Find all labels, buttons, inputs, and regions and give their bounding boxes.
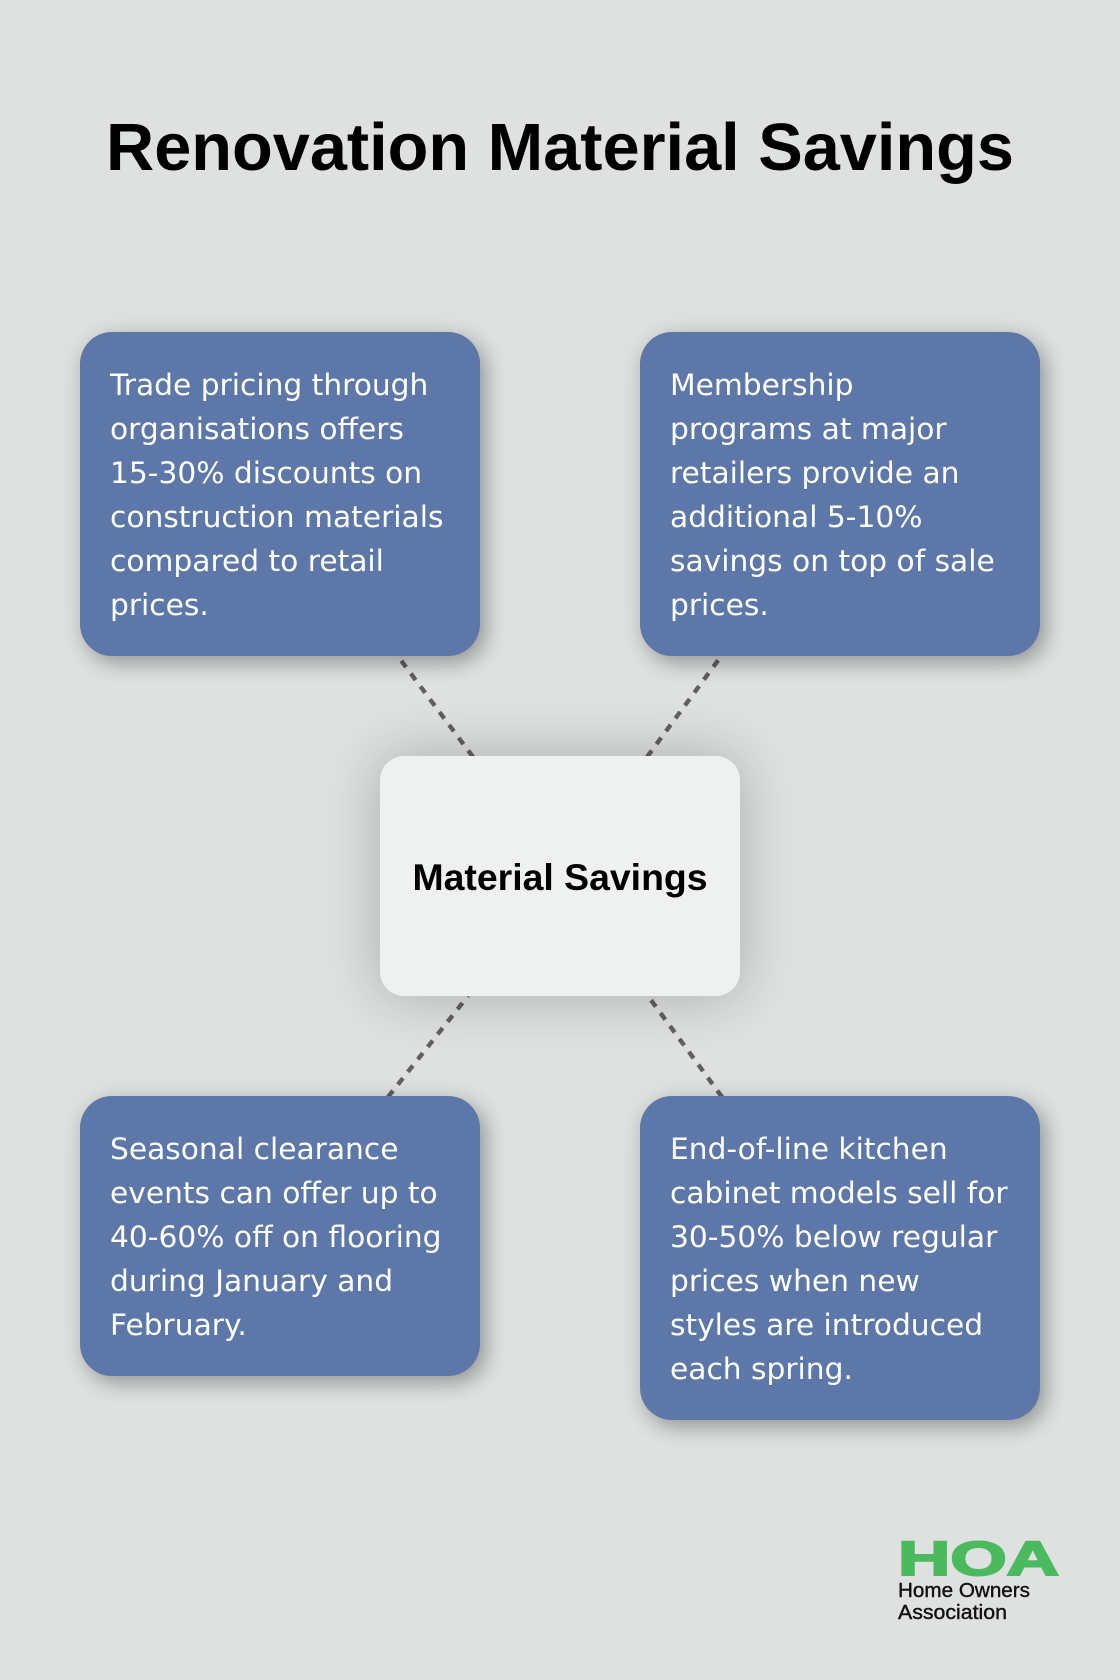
panel: trade pricing: Trade pricing through [110, 368, 428, 403]
panel: trade pricing: construction materials [110, 500, 443, 535]
panel: trade pricing: compared to retail [110, 544, 384, 579]
panel: trade pricing [80, 332, 480, 656]
title: Renovation Material Savings [106, 111, 1014, 185]
panel: end-of-line cabinets: each spring. [670, 1352, 853, 1387]
panel: seasonal clearance: during January and [110, 1264, 393, 1299]
panel: membership programs: Membership [670, 368, 854, 403]
panel: trade pricing: 15-30% discounts on [110, 456, 422, 491]
logo: HOA: HOA [898, 1533, 1059, 1586]
panel: end-of-line cabinets: prices when new [670, 1264, 920, 1299]
panel: end-of-line cabinets: End-of-line kitchen [670, 1132, 948, 1167]
panel: seasonal clearance [80, 1096, 480, 1376]
panel: end-of-line cabinets: styles are introduced [670, 1308, 983, 1343]
panel: membership programs: programs at major [670, 412, 947, 447]
panel: seasonal clearance: February. [110, 1308, 247, 1343]
panel: seasonal clearance: events can offer up to [110, 1176, 438, 1211]
panel: trade pricing: prices. [110, 588, 209, 623]
panel: seasonal clearance: 40-60% off on flooring [110, 1220, 442, 1255]
panel: membership programs: savings on top of sale [670, 544, 995, 579]
panel: membership programs: additional 5-10% [670, 500, 922, 535]
logo: HOA [898, 1533, 1060, 1624]
panel: membership programs [640, 332, 1040, 656]
panel: end-of-line cabinets: cabinet models sell for [670, 1176, 1008, 1211]
panel: membership programs: prices. [670, 588, 769, 623]
panel: seasonal clearance: Seasonal clearance [110, 1132, 398, 1167]
logo: HOA: Association [898, 1602, 1007, 1624]
panel: end-of-line cabinets [640, 1096, 1040, 1420]
panel: central node: Material Savings [412, 856, 708, 898]
logo: HOA: Home Owners [898, 1580, 1030, 1602]
panel: end-of-line cabinets: 30-50% below regular [670, 1220, 997, 1255]
panel: trade pricing: organisations offers [110, 412, 404, 447]
panel: membership programs: retailers provide an [670, 456, 959, 491]
panel: central node [380, 756, 740, 996]
